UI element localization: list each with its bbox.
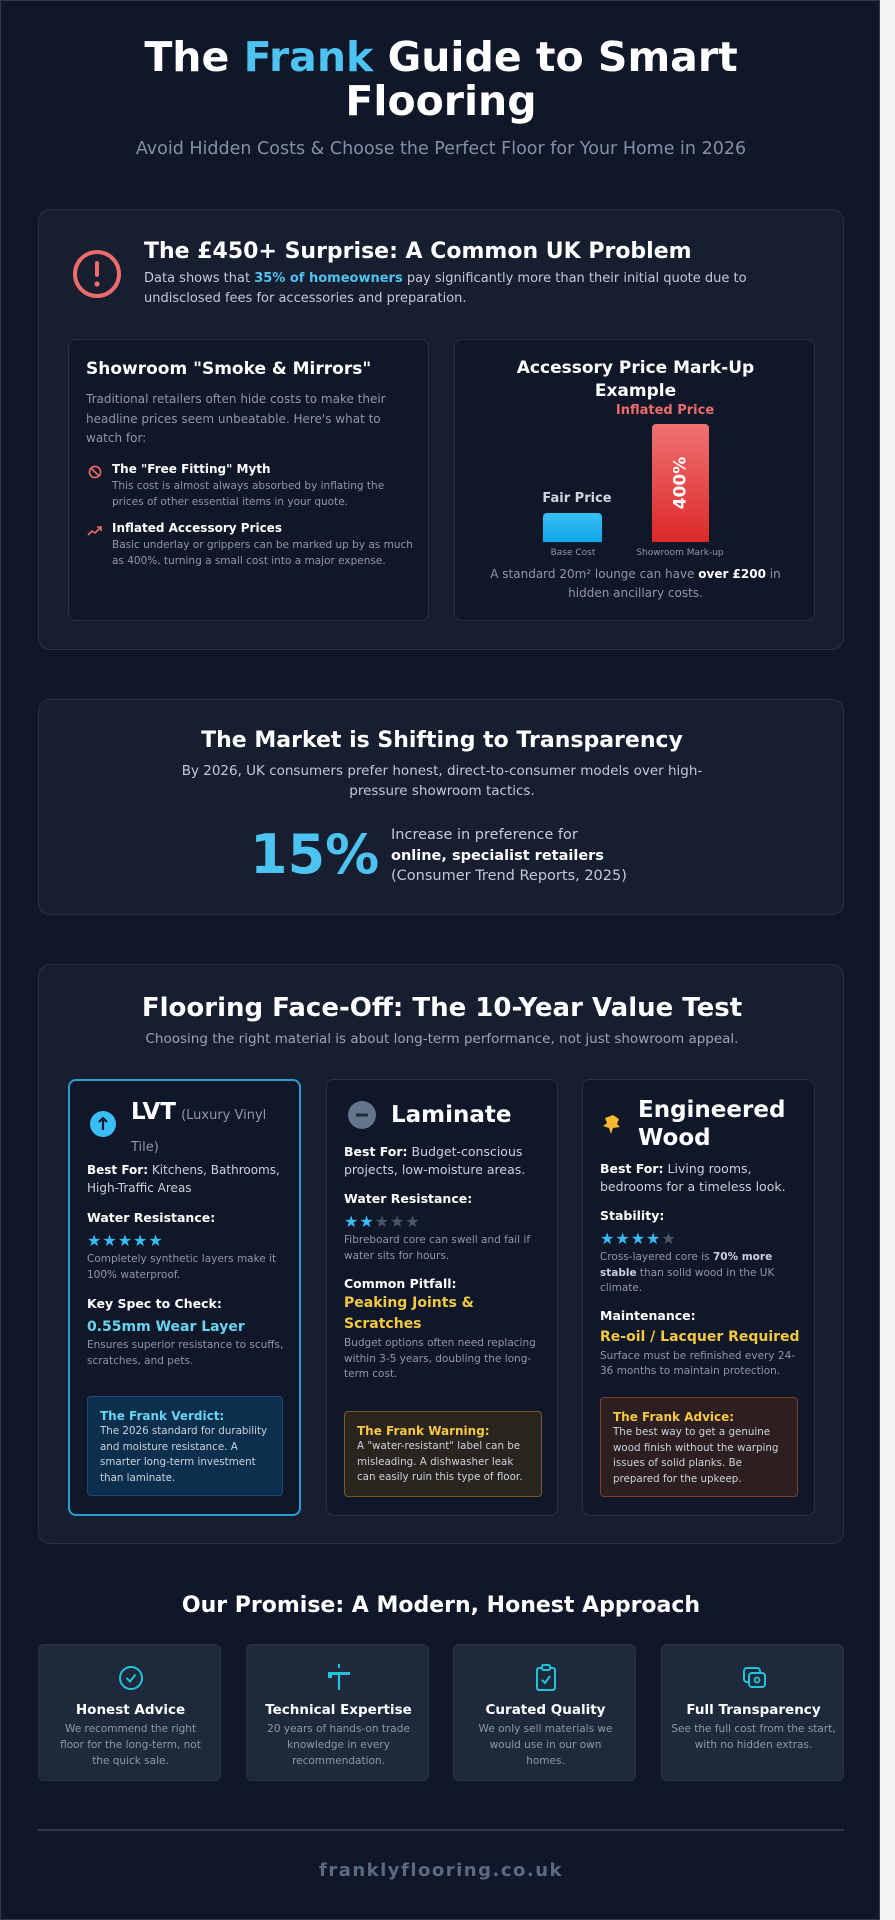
card: LVT: 0.55mm Wear Layer <box>87 1319 245 1335</box>
card: Laminate: Common Pitfall: <box>344 1276 457 1291</box>
card: Engineered Wood <box>582 1079 815 1516</box>
panel: promise honest advice <box>38 1644 221 1781</box>
card: Laminate: Fibreboard core can swell and fail if water sits for hours. <box>344 1234 530 1262</box>
icon: laminate <box>348 1101 376 1129</box>
callout: frank warning <box>344 1411 542 1497</box>
icon: prohibited <box>88 466 102 478</box>
item: free fitting myth: This cost is almost always absorbed by inflating the prices of other essential items in your quote. <box>112 480 384 508</box>
bar chart: Inflated Price <box>616 403 714 418</box>
panel: promise honest advice: Honest Advice <box>76 1702 185 1718</box>
item: free fitting myth <box>88 462 384 508</box>
callout: frank verdict: The Frank Verdict: <box>100 1409 224 1423</box>
callout: frank warning: The Frank Warning: <box>357 1424 490 1438</box>
card: Laminate: Best For: Budget-conscious projects, low-moisture areas. <box>344 1144 525 1177</box>
panel: flooring face-off <box>38 964 844 1544</box>
panel: promise technical expertise: 20 years of hands-on trade knowledge in every recommendation. <box>267 1723 410 1767</box>
panel: promise full transparency: Full Transparency <box>686 1702 821 1718</box>
stat description: Increase in preference for <box>391 827 578 843</box>
item: free fitting myth: The "Free Fitting" Myth <box>112 462 271 476</box>
card title: Laminate <box>391 1102 512 1128</box>
intro text: Data shows that 35% of homeowners pay significantly more than their initial quote due to undisclosed fees for accessories and preparation. <box>144 271 747 306</box>
card: Laminate: Peaking Joints & Scratches <box>344 1295 474 1332</box>
item: inflated accessory prices <box>88 521 413 566</box>
panel: promise curated quality: We only sell materials we would use in our own homes. <box>479 1723 612 1767</box>
card: Engineered Wood: Surface must be refinished every 24-36 months to maintain protection. <box>600 1350 795 1377</box>
chart title: Accessory Price Mark-Up <box>517 358 754 378</box>
card: Engineered Wood: Re-oil / Lacquer Required <box>600 1328 800 1344</box>
card: Engineered Wood: Best For: Living rooms, bedrooms for a timeless look. <box>600 1161 786 1194</box>
item: inflated accessory prices: Inflated Accessory Prices <box>112 521 282 535</box>
card: Engineered Wood: Cross-layered core is 70% more stable than solid wood in the UK climate. <box>600 1251 774 1294</box>
card: LVT: Completely synthetic layers make it 100% waterproof. <box>87 1253 276 1280</box>
chart title: Example <box>595 381 676 401</box>
icon: wood <box>603 1115 620 1134</box>
item: inflated accessory prices: Basic underlay or grippers can be marked up by as much as 400%, turning a small cost into a major expense. <box>112 539 413 566</box>
bar chart <box>542 403 724 558</box>
card: Laminate: ★★★★★ <box>344 1212 421 1231</box>
panel: promise technical expertise <box>246 1644 429 1781</box>
bar chart: Base Cost <box>551 548 595 558</box>
icon: money <box>743 1667 766 1688</box>
icon: clipboard <box>536 1664 556 1691</box>
title: The Frank Guide to Smart <box>144 33 738 81</box>
footer: franklyflooring.co.uk <box>319 1860 563 1881</box>
callout: frank advice: The Frank Advice: <box>613 1410 734 1424</box>
icon: trend up <box>88 526 102 536</box>
callout: frank verdict: The 2026 standard for durability and moisture resistance. A smarter long-term investment than laminate. <box>100 1425 267 1484</box>
card: LVT: Ensures superior resistance to scuffs, scratches, and pets. <box>87 1339 283 1366</box>
bar chart: 400% <box>670 457 690 509</box>
heading: The £450+ Surprise: A Common UK Problem <box>144 239 692 264</box>
card heading: Showroom "Smoke & Mirrors" <box>86 359 371 379</box>
bar chart: Fair Price <box>542 491 612 506</box>
card: price markup chart <box>454 339 815 621</box>
panel: hidden costs problem <box>38 209 844 650</box>
card: Engineered Wood: Maintenance: <box>600 1308 696 1322</box>
card title <box>638 1097 785 1151</box>
card title: Engineered <box>638 1097 785 1123</box>
bar chart: Showroom Mark-up <box>636 548 724 558</box>
icon: LVT <box>90 1111 116 1137</box>
panel: promise technical expertise: Technical Expertise <box>265 1702 412 1718</box>
card: Engineered Wood: ★★★★★ <box>600 1229 677 1248</box>
card: LVT <box>68 1079 301 1516</box>
stat: 15%: 15% <box>250 823 379 886</box>
stat description <box>391 827 627 884</box>
card: LVT: Best For: Kitchens, Bathrooms, <box>87 1163 280 1177</box>
card: Laminate: Budget options often need replacing within 3-5 years, doubling the long-term cost. <box>344 1337 536 1380</box>
subtitle: Avoid Hidden Costs & Choose the Perfect Floor for Your Home in 2026 <box>136 139 746 159</box>
card: LVT: Key Spec to Check: <box>87 1296 222 1311</box>
callout: frank advice: The best way to get a genuine wood finish without the warping issues of solid planks. Be prepared for the upkeep. <box>613 1426 778 1484</box>
callout: frank verdict <box>87 1396 283 1496</box>
panel: promise full transparency: See the full cost from the start, with no hidden extras. <box>671 1723 836 1751</box>
callout: frank warning: A "water-resistant" label can be misleading. A dishwasher leak can easily ruin this type of floor. <box>357 1440 522 1483</box>
chart title <box>516 358 754 401</box>
panel: market shifting <box>38 699 844 915</box>
card title: LVT (Luxury Vinyl Tile) <box>131 1099 266 1155</box>
panel: promise honest advice: We recommend the right floor for the long-term, not the quick sale. <box>60 1723 201 1767</box>
panel: promise full transparency <box>661 1644 844 1781</box>
stat description: online, specialist retailers <box>391 848 604 864</box>
icon: check circle <box>119 1666 143 1690</box>
heading: The Market is Shifting to Transparency <box>201 728 683 753</box>
chart caption: A standard 20m² lounge can have over £200 in hidden ancillary costs. <box>490 567 781 600</box>
card: Engineered Wood: Stability: <box>600 1208 664 1223</box>
callout: frank advice <box>600 1397 798 1497</box>
card text: Traditional retailers often hide costs to make their headline prices seem unbeatable. Here's what to watch for: <box>86 392 386 445</box>
card title: Wood <box>638 1125 711 1151</box>
subheading: Choosing the right material is about long-term performance, not just showroom appeal. <box>146 1031 738 1047</box>
stat description: (Consumer Trend Reports, 2025) <box>391 868 627 884</box>
panel: promise curated quality <box>453 1644 636 1781</box>
panel: promise curated quality: Curated Quality <box>486 1702 605 1718</box>
title: Flooring <box>345 77 537 125</box>
heading: Flooring Face-Off: The 10-Year Value Test <box>142 993 742 1023</box>
icon: tool <box>328 1664 350 1690</box>
card: Laminate: Water Resistance: <box>344 1191 472 1206</box>
heading: our promise: Our Promise: A Modern, Honest Approach <box>182 1593 700 1618</box>
card: LVT: Water Resistance: <box>87 1210 215 1225</box>
title <box>144 33 738 125</box>
card: smoke and mirrors <box>68 339 429 621</box>
card: Laminate <box>326 1079 558 1516</box>
text: By 2026, UK consumers prefer honest, direct-to-consumer models over high-pressure showroom tactics. <box>182 763 702 799</box>
card: LVT: ★★★★★ <box>87 1231 164 1250</box>
icon: warning circle <box>73 250 121 298</box>
card: LVT: High-Traffic Areas <box>87 1181 192 1195</box>
